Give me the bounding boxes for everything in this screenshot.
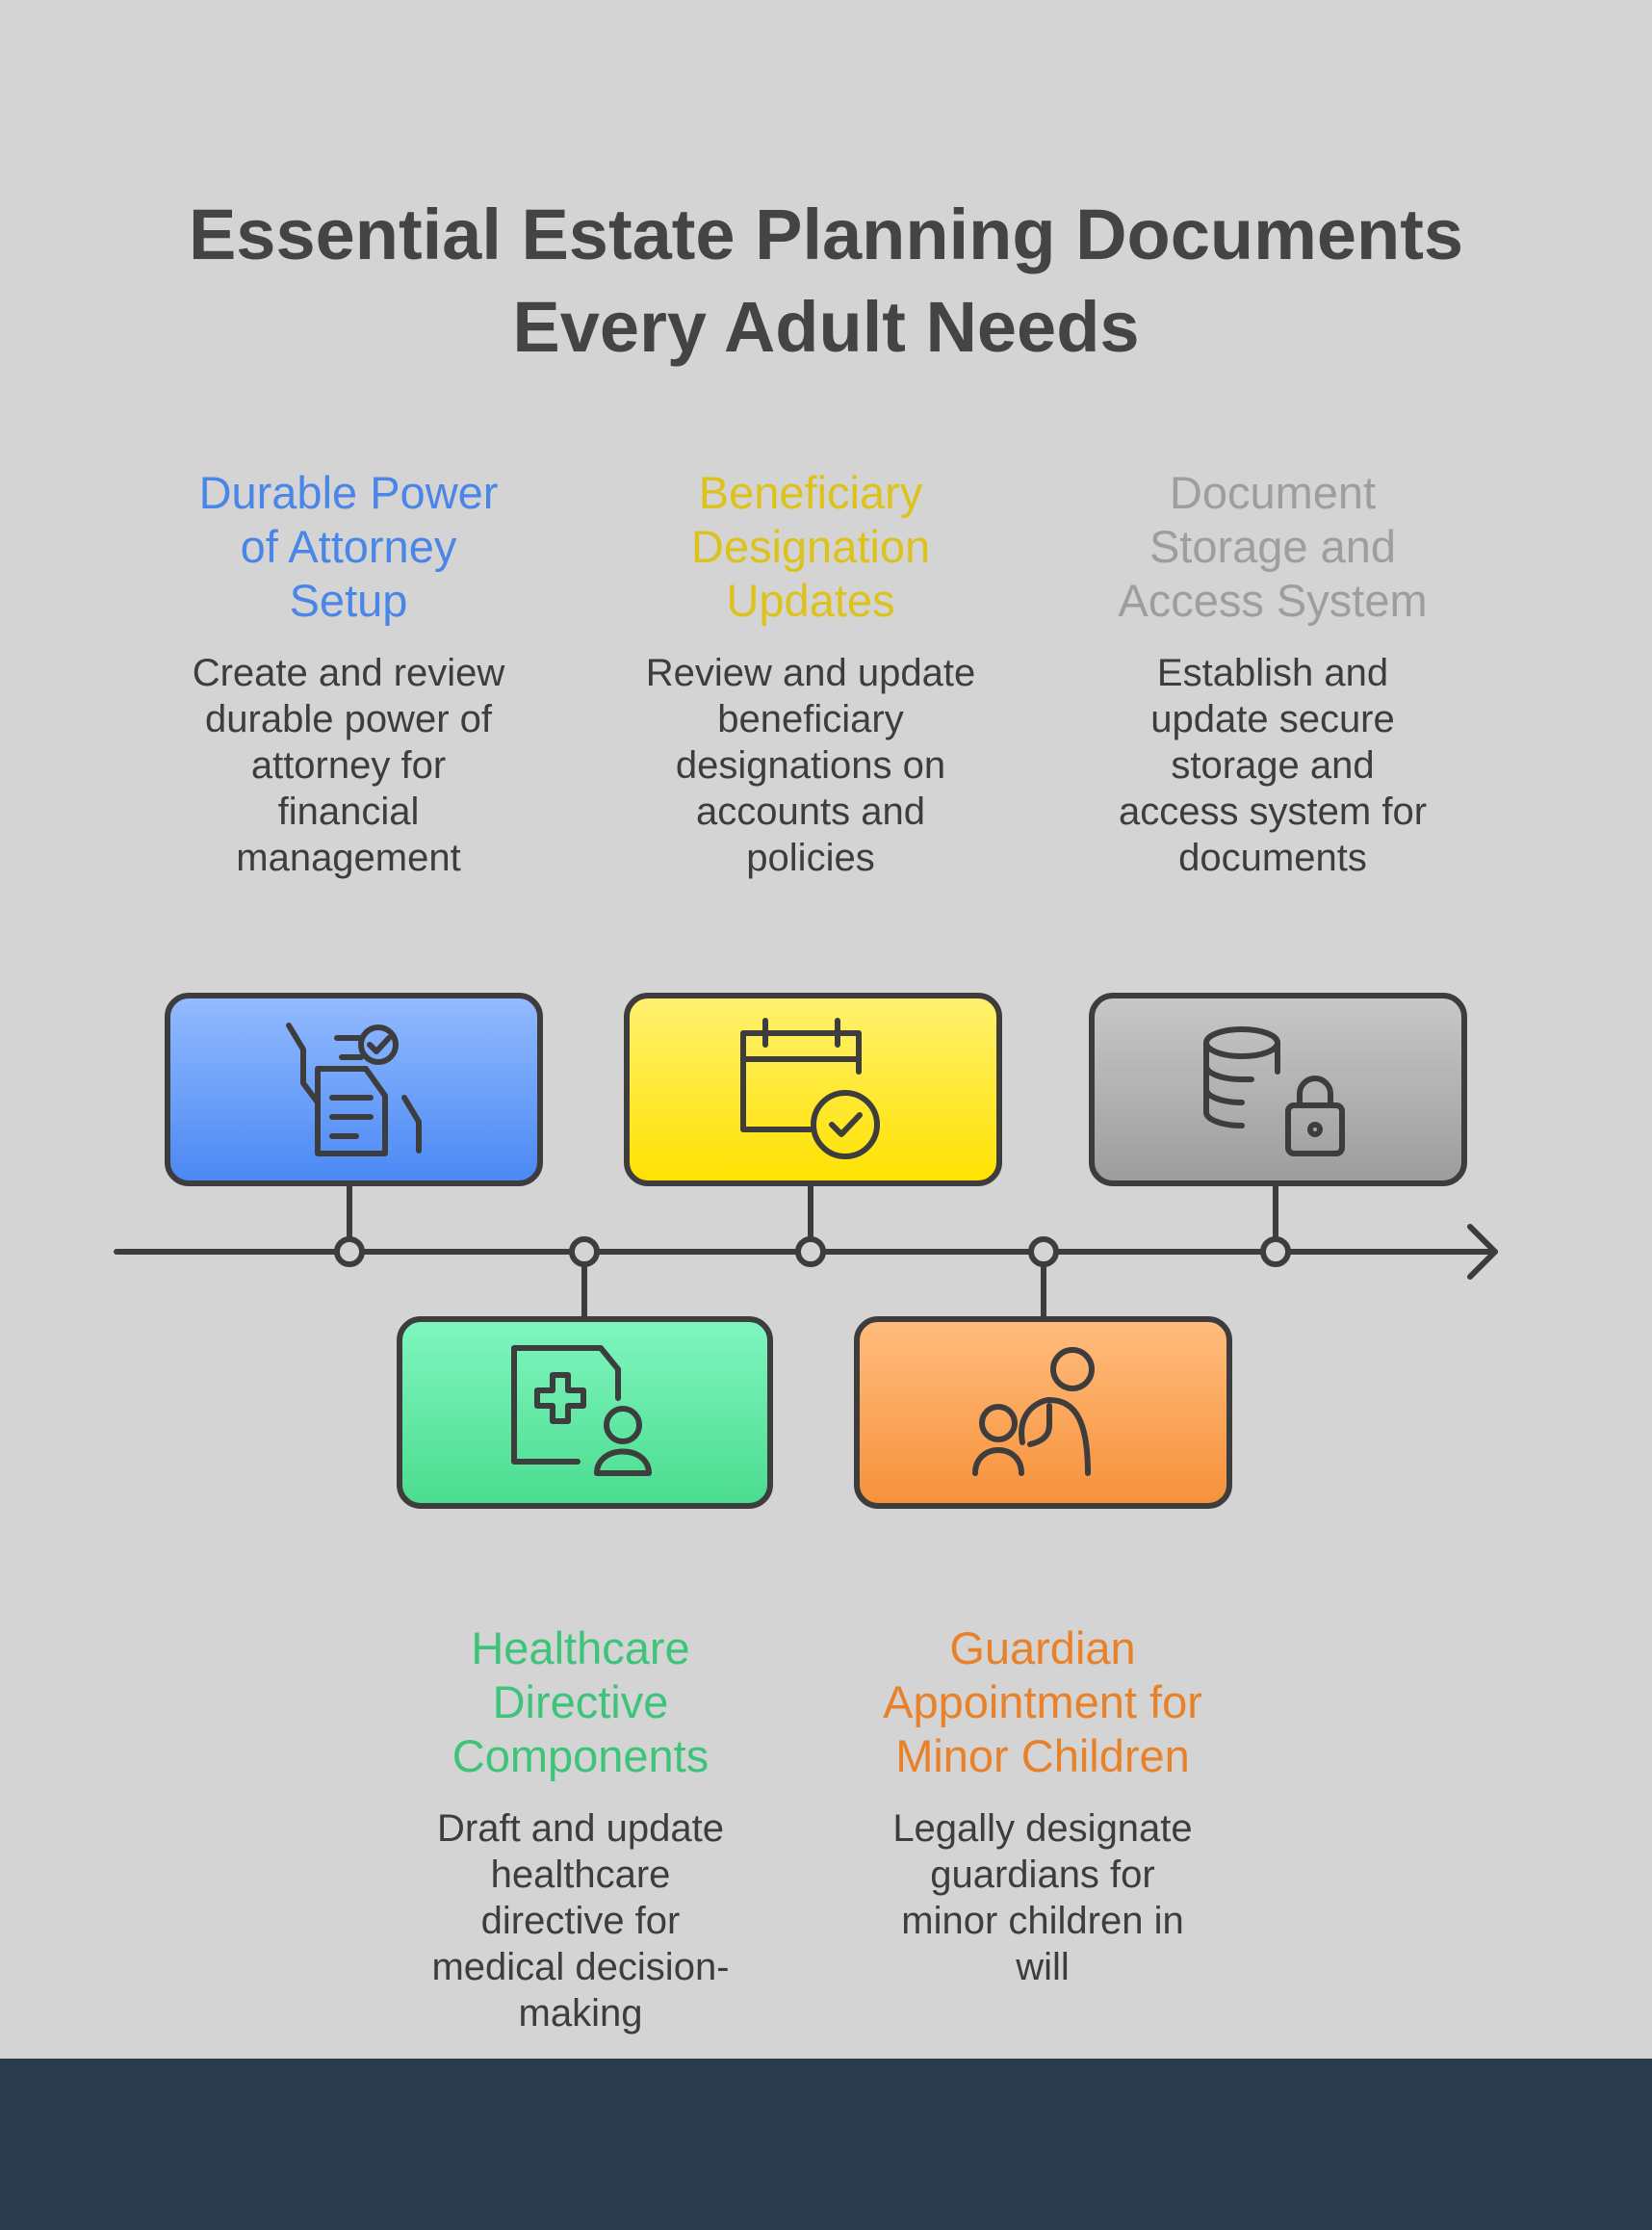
text: healthcare description: directive for — [481, 1900, 680, 1942]
text: guardian description: minor children in — [901, 1900, 1184, 1942]
heading: beneficiary: Beneficiary — [699, 467, 922, 518]
text: storage description: update secure — [1150, 698, 1395, 740]
connectors — [349, 1183, 1276, 1319]
text: beneficiary description: policies — [746, 837, 875, 879]
heading: durable power of attorney: of Attorney — [241, 521, 456, 572]
text: guardian description: Legally designate — [892, 1807, 1193, 1850]
heading: durable power of attorney — [199, 467, 498, 626]
timeline nodes — [337, 1239, 1288, 1264]
text: durable power description — [193, 652, 504, 879]
box: green with healthcare icon — [400, 1319, 770, 1506]
text: durable power description: attorney for — [251, 744, 446, 787]
text: guardian description: guardians for — [930, 1854, 1155, 1896]
box: blue with attorney icon — [168, 996, 540, 1183]
heading: storage — [1118, 467, 1428, 626]
footer band — [0, 2059, 1652, 2230]
heading: guardian: Minor Children — [895, 1730, 1190, 1781]
text: storage description: Establish and — [1157, 652, 1388, 694]
text: guardian description: will — [1016, 1946, 1070, 1988]
box: orange with guardian icon — [857, 1319, 1229, 1506]
heading: beneficiary — [691, 467, 930, 626]
title: Essential Estate Planning Documents — [189, 194, 1463, 274]
text: durable power description: durable power of — [205, 698, 492, 740]
text: beneficiary description: designations on — [676, 744, 945, 787]
heading: durable power of attorney: Setup — [290, 575, 407, 626]
text: healthcare description: healthcare — [491, 1854, 670, 1896]
heading: storage: Document — [1170, 467, 1376, 518]
text: healthcare description: making — [519, 1992, 642, 2035]
timeline axis with arrow — [116, 1227, 1495, 1277]
text: storage description: documents — [1178, 837, 1367, 879]
text: durable power description: Create and review — [193, 652, 504, 694]
text: guardian description — [892, 1807, 1193, 1988]
text: storage description: access system for — [1119, 791, 1427, 833]
text: beneficiary description: Review and update — [646, 652, 975, 694]
heading: healthcare: Directive — [493, 1676, 668, 1727]
heading: healthcare: Healthcare — [471, 1622, 690, 1673]
text: beneficiary description: accounts and — [696, 791, 925, 833]
text: storage description — [1119, 652, 1427, 879]
heading: healthcare — [452, 1622, 709, 1781]
text: healthcare description — [431, 1807, 730, 2035]
box: yellow with calendar icon — [627, 996, 999, 1183]
heading: guardian — [883, 1622, 1202, 1781]
heading: healthcare: Components — [452, 1730, 709, 1781]
title — [189, 194, 1463, 367]
heading: guardian: Appointment for — [883, 1676, 1202, 1727]
text: healthcare description: medical decision- — [431, 1946, 730, 1988]
heading: beneficiary: Designation — [691, 521, 930, 572]
heading: durable power of attorney: Durable Power — [199, 467, 498, 518]
heading: guardian: Guardian — [949, 1622, 1136, 1673]
title: Every Adult Needs — [512, 287, 1140, 367]
text: durable power description: financial — [278, 791, 419, 833]
heading: storage: Access System — [1118, 575, 1428, 626]
text: durable power description: management — [236, 837, 461, 879]
text: beneficiary description — [646, 652, 975, 879]
text: storage description: storage and — [1171, 744, 1375, 787]
text: beneficiary description: beneficiary — [717, 698, 904, 740]
text: healthcare description: Draft and update — [437, 1807, 724, 1850]
heading: beneficiary: Updates — [726, 575, 895, 626]
heading: storage: Storage and — [1149, 521, 1396, 572]
box: gray with database lock icon — [1092, 996, 1464, 1183]
